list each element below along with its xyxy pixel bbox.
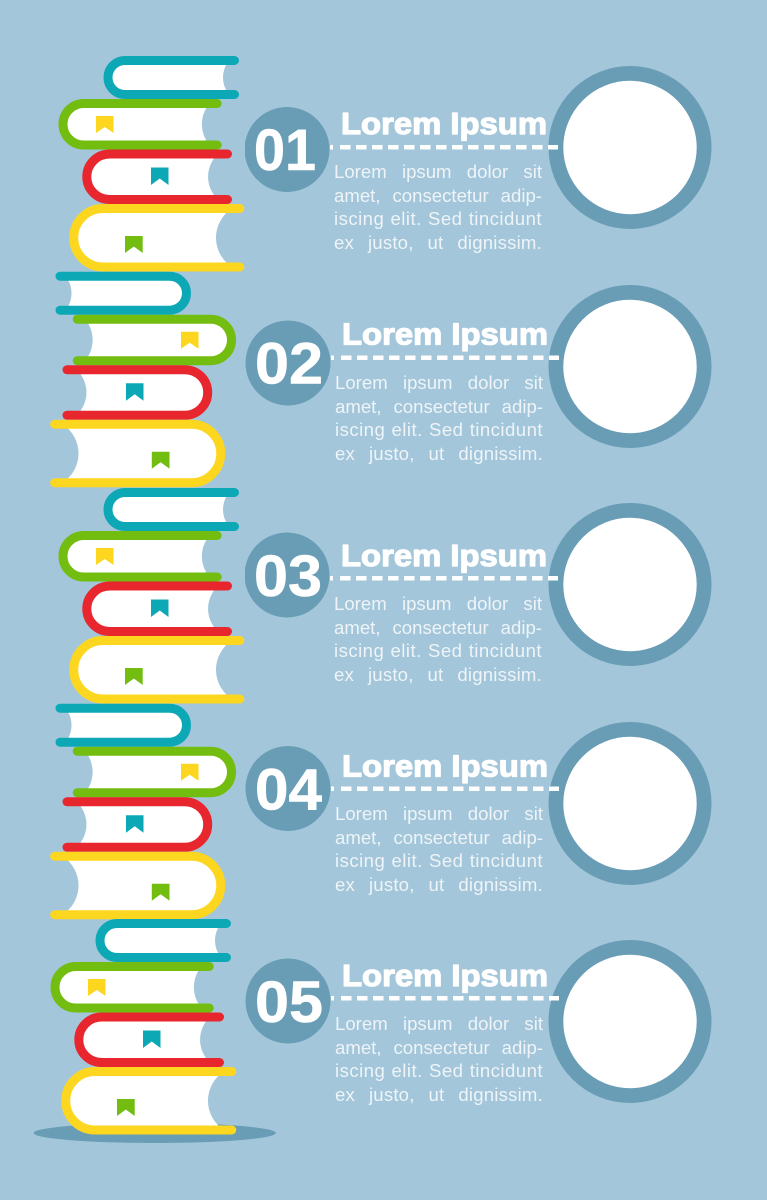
number badge 03: 03 xyxy=(254,544,322,609)
body text 05: ex justo, ut dignissim. xyxy=(335,1084,543,1105)
body text 05: Lorem ipsum dolor sit xyxy=(335,1013,543,1034)
image circle 03 xyxy=(330,510,704,659)
number badge 02 xyxy=(246,320,330,405)
number badge 02: 02 xyxy=(255,331,323,396)
heading 02: Lorem Ipsum xyxy=(342,316,548,351)
body text 01: amet, consectetur adip- xyxy=(334,185,542,206)
panel: step 01 xyxy=(245,66,712,253)
body text 04 xyxy=(335,803,543,895)
body text 03: ex justo, ut dignissim. xyxy=(334,664,542,685)
body text 02: ex justo, ut dignissim. xyxy=(335,443,543,464)
number badge 05 xyxy=(246,958,330,1044)
number badge 01: 01 xyxy=(254,118,316,183)
panel: step 04 xyxy=(246,722,712,895)
image circle 02 xyxy=(331,292,704,440)
ground shadow xyxy=(34,1123,276,1143)
body text 05 xyxy=(335,1013,543,1105)
body text 03 xyxy=(334,593,542,685)
number badge 04: 04 xyxy=(255,757,322,822)
body text 01 xyxy=(334,161,542,253)
body text 01: ex justo, ut dignissim. xyxy=(334,232,542,253)
body text 01: Lorem ipsum dolor sit xyxy=(334,161,542,182)
body text 02: Lorem ipsum dolor sit xyxy=(335,372,543,393)
book group 4 xyxy=(55,708,232,915)
book group 2 xyxy=(55,276,232,483)
body text 02: amet, consectetur adip- xyxy=(335,396,543,417)
body text 04: amet, consectetur adip- xyxy=(335,827,543,848)
body text 02 xyxy=(335,372,543,464)
body text 04: Lorem ipsum dolor sit xyxy=(335,803,543,824)
body text 03: amet, consectetur adip- xyxy=(334,617,542,638)
book group 5 xyxy=(55,924,232,1130)
image circle 05 xyxy=(331,947,704,1096)
heading 04: Lorem Ipsum xyxy=(342,748,548,783)
body text 04: iscing elit. Sed tincidunt xyxy=(335,850,543,871)
number badge 01 xyxy=(244,107,330,192)
number badge 04 xyxy=(246,746,330,830)
body text 03: iscing elit. Sed tincidunt xyxy=(334,640,542,661)
panel: step 03 xyxy=(245,503,712,685)
body text 05: amet, consectetur adip- xyxy=(335,1037,543,1058)
book group 1 xyxy=(63,60,240,267)
panel: step 05 xyxy=(246,940,712,1105)
number badge 05: 05 xyxy=(255,970,323,1035)
body text 03: Lorem ipsum dolor sit xyxy=(334,593,542,614)
image circle 04 xyxy=(331,729,704,877)
heading 03: Lorem Ipsum xyxy=(341,538,547,573)
heading 01: Lorem Ipsum xyxy=(341,106,547,141)
body text 01: iscing elit. Sed tincidunt xyxy=(334,208,542,229)
body text 02: iscing elit. Sed tincidunt xyxy=(335,419,543,440)
heading 05: Lorem Ipsum xyxy=(342,958,548,993)
image circle 01 xyxy=(330,73,704,222)
body text 05: iscing elit. Sed tincidunt xyxy=(335,1060,543,1081)
body text 04: ex justo, ut dignissim. xyxy=(335,874,543,895)
panel: step 02 xyxy=(246,285,712,464)
number badge 03 xyxy=(244,532,330,618)
book group 3 xyxy=(63,492,240,699)
